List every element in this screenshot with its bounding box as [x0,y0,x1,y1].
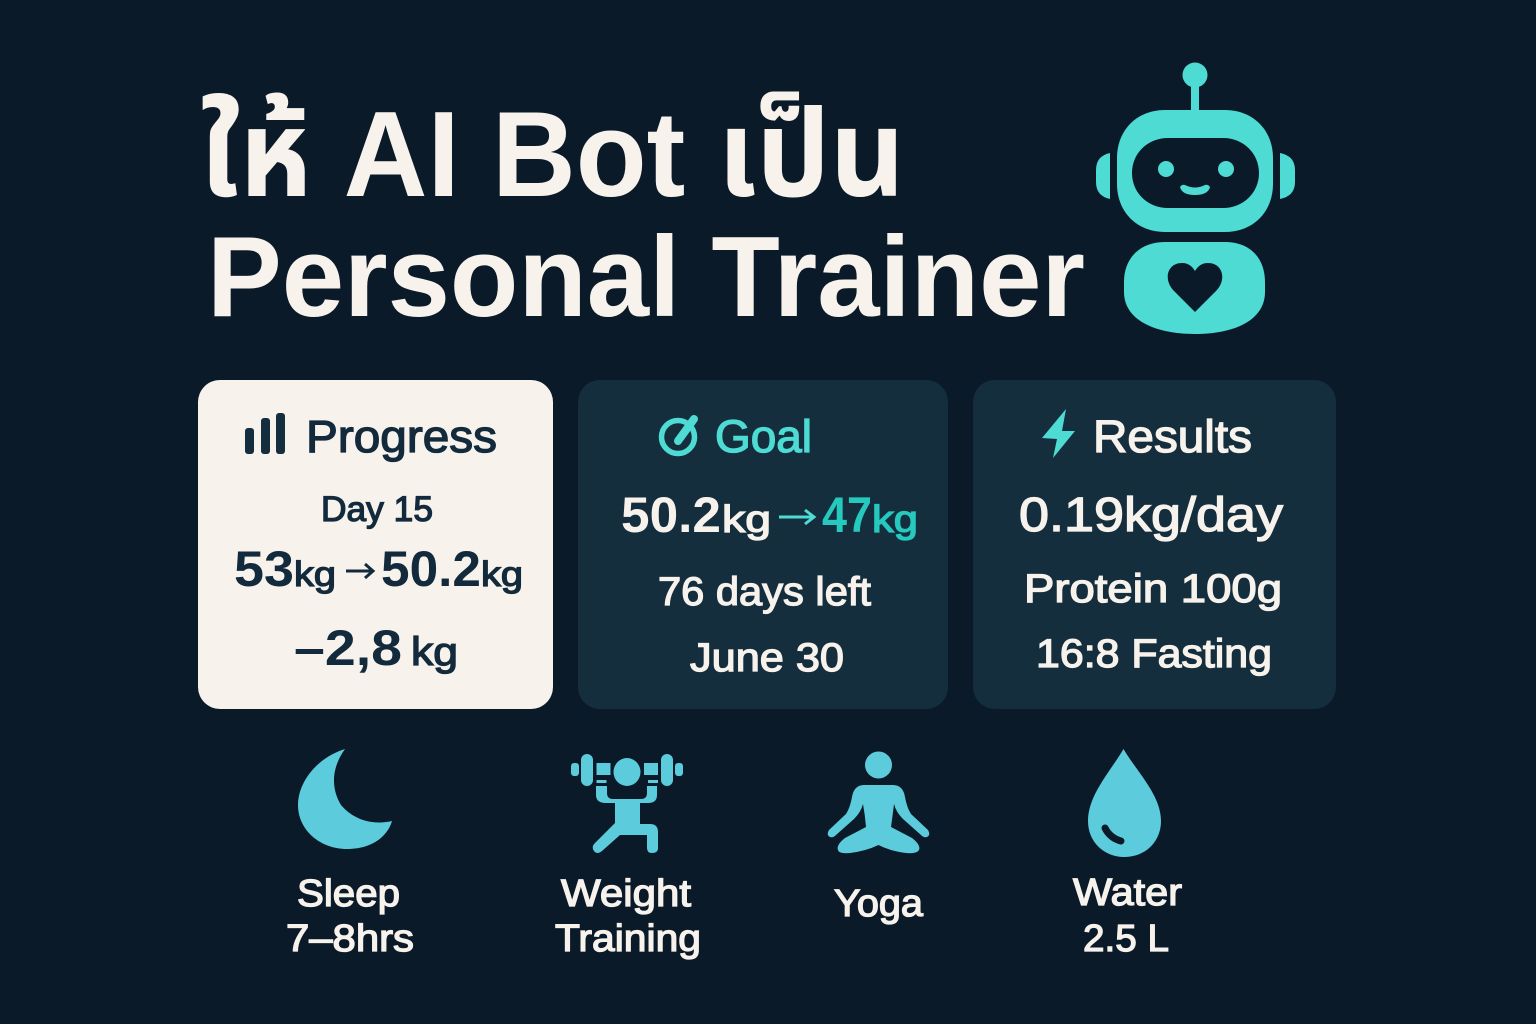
sleep item [286,749,414,960]
weight change: kg [294,555,336,594]
weight training label: Training [555,918,701,960]
goal weight [621,487,918,543]
sleep label: Sleep [297,873,400,915]
goal heading: Goal [715,411,812,462]
rate: 0.19kg/day [1019,489,1283,542]
arrow [346,564,373,578]
goal weight: kg [722,499,771,541]
sleep label: 7–8hrs [286,918,414,960]
goal weight: kg [872,499,918,541]
weight training label [555,873,701,960]
weight lost: kg [411,630,458,674]
icon: target [662,419,694,454]
progress heading: Progress [306,411,497,462]
title line 1: ให้ AI Bot เป็น [200,86,905,222]
weight training label: Weight [561,873,691,915]
water label: Water [1073,872,1182,914]
day label: Day 15 [321,490,433,529]
fasting: 16:8 Fasting [1036,632,1272,676]
water item [1073,749,1182,960]
results heading: Results [1093,411,1252,462]
icon: bar chart [245,413,285,454]
icon: water drop [1088,749,1161,857]
weight change [234,541,523,597]
icon: weightlifter [571,754,683,853]
weight lost: –2,8 [294,620,402,676]
icon: lightning bolt [1042,409,1075,458]
icon: meditating figure [828,752,929,853]
goal weight: 47 [822,487,872,543]
title line 2: Personal Trainer [207,214,1085,341]
protein: Protein 100g [1024,567,1282,611]
icon: robot mascot [1096,62,1295,334]
date: June 30 [690,636,844,680]
weight change: kg [481,555,523,594]
weight change: 53 [234,541,294,597]
water label: 2.5 L [1083,918,1169,960]
panel: goal [578,380,948,709]
water label [1073,872,1182,960]
sleep label [286,873,414,960]
icon: moon [298,749,392,849]
panel: progress [198,380,553,709]
goal weight: 50.2 [621,487,721,543]
arrow [779,510,814,524]
weight change: 50.2 [381,541,481,597]
panel: results [973,380,1336,709]
yoga item [828,752,929,925]
weight lost [294,620,458,676]
weight training item [555,754,701,960]
yoga label: Yoga [834,883,924,925]
title [200,86,1085,341]
days left: 76 days left [658,570,871,614]
